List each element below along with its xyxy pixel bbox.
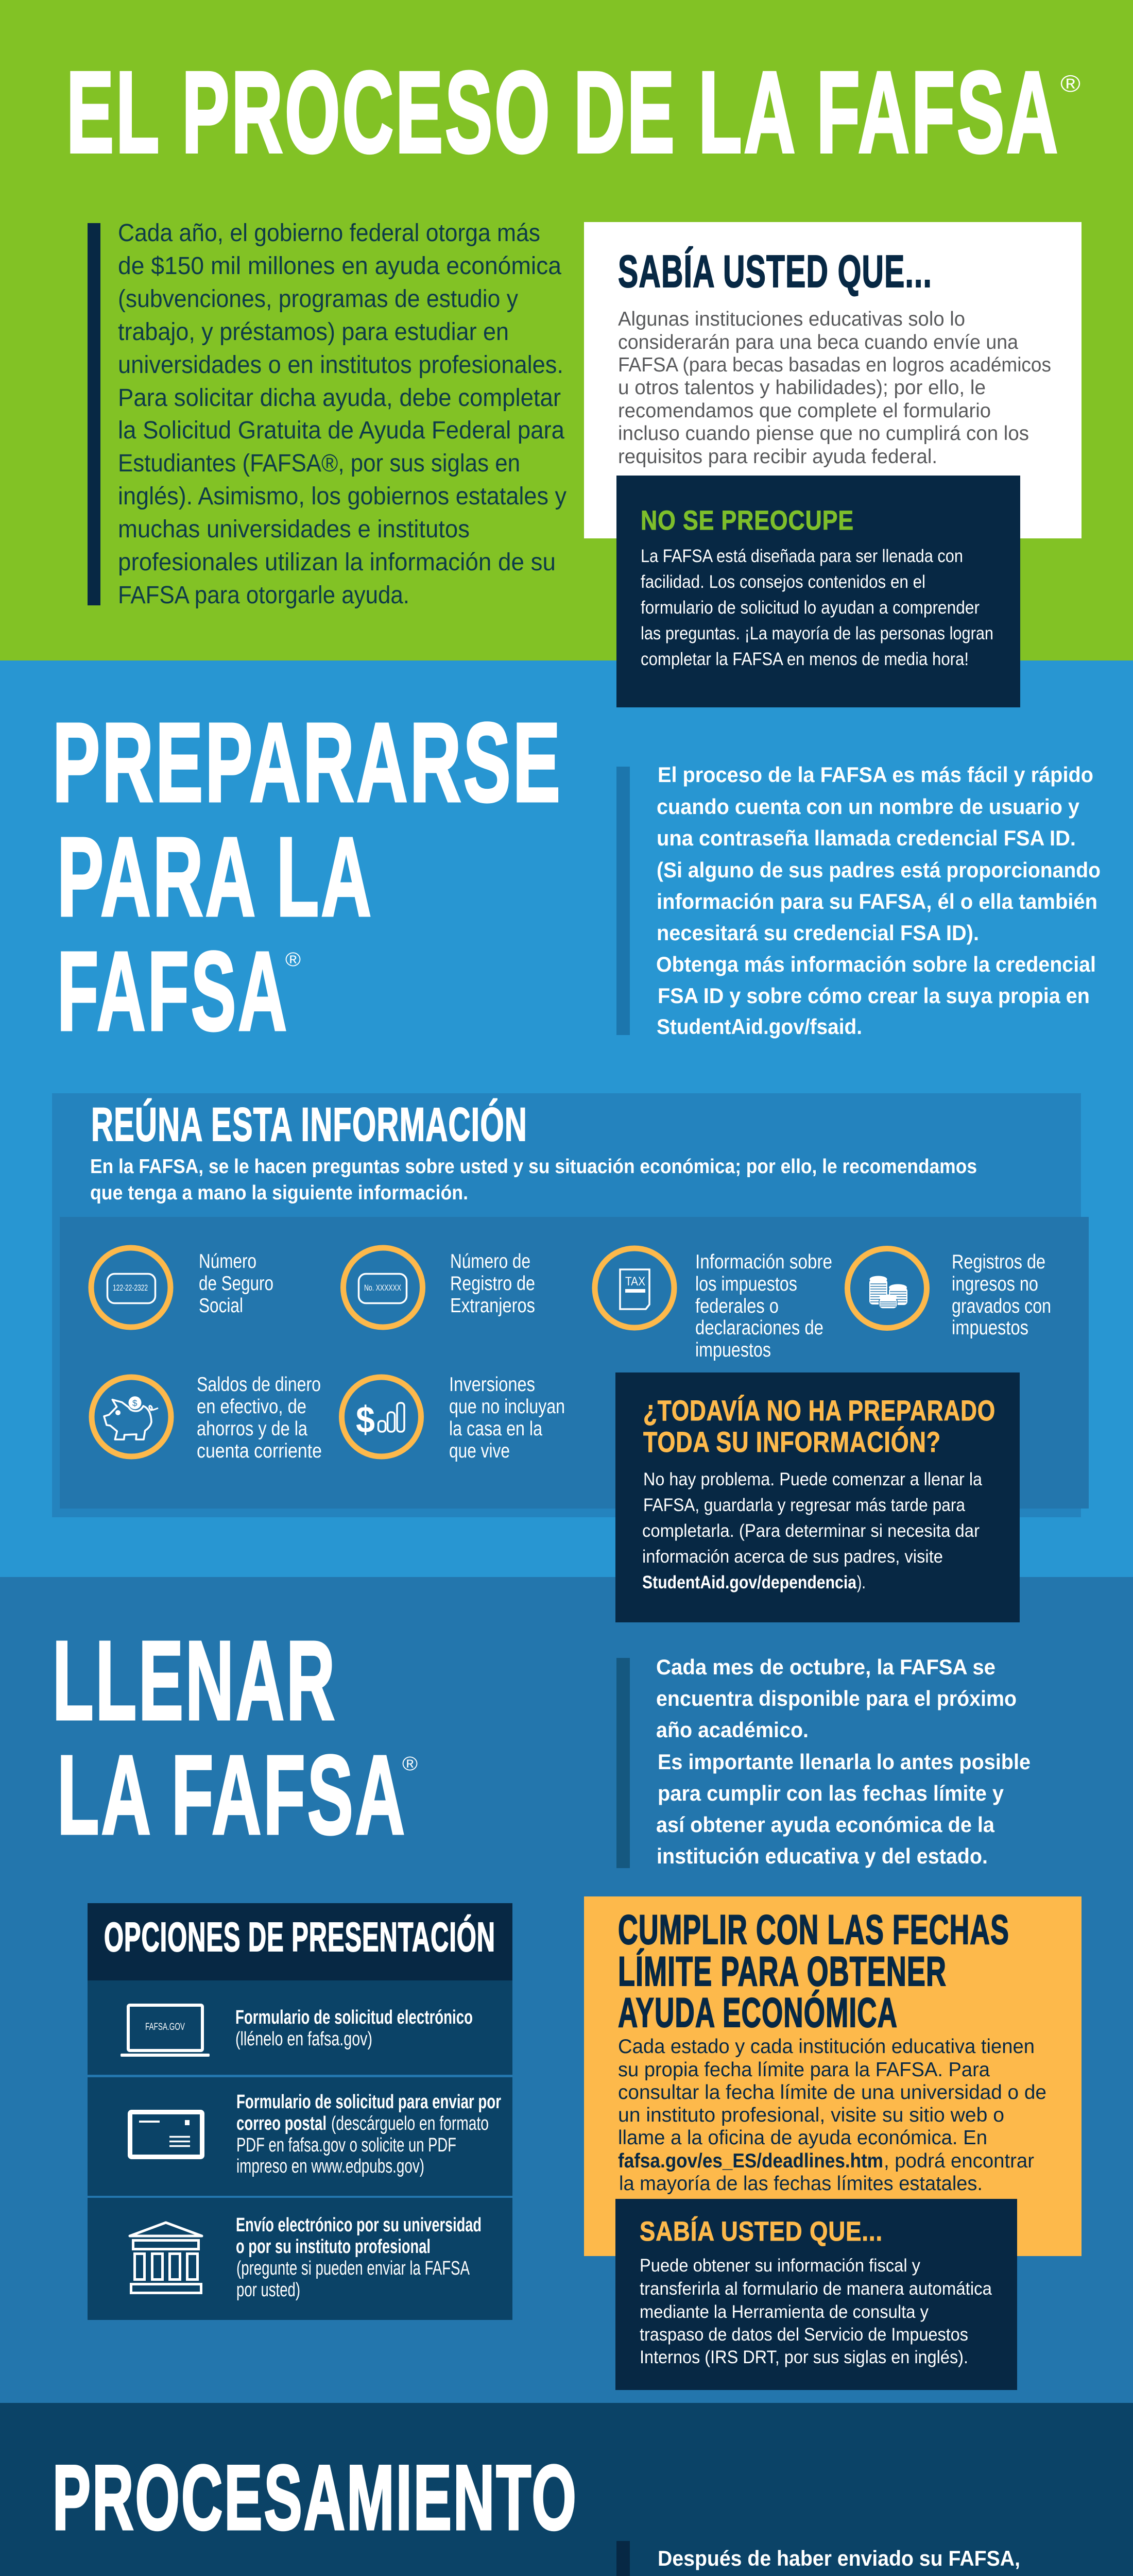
intro text block: universidades o en institutos profesionales. (118, 351, 563, 379)
text: sabía usted que body: FAFSA (para becas basadas en logros académicos (618, 354, 1051, 376)
heading: todavía no ha preparado (643, 1394, 995, 1458)
label: ingresos no gravados: impuestos (952, 1317, 1028, 1339)
text block: preparation intro: (Si alguno de sus padres está proporcionando (657, 858, 1101, 882)
label: ingresos no gravados: Registros de (952, 1251, 1045, 1273)
label: número de registro de extranjeros (450, 1250, 535, 1317)
section background: bright blue prepare (0, 660, 1133, 1577)
text: todavía body: No hay problema. Puede comenzar a llenar la (643, 1469, 982, 1489)
text: irs body: transferirla al formulario de manera automática (640, 2279, 992, 2299)
intro text block (88, 219, 566, 609)
text: reúna intro: En la FAFSA, se le hacen preguntas sobre usted y su situación económica; por ello, le recomendamos (90, 1156, 977, 1178)
label: impuestos federales: impuestos (695, 1339, 771, 1361)
title: ® (1060, 70, 1080, 97)
label: número de seguro social: Social (199, 1295, 243, 1317)
text: irs body: Puede obtener su información fiscal y (640, 2256, 920, 2276)
text: todavía body: ). (857, 1572, 866, 1592)
label: impuestos federales (695, 1251, 832, 1361)
icon: envelope (130, 2112, 202, 2157)
panel: reúna esta información (52, 1093, 1089, 1517)
icon: social security card (91, 1248, 170, 1327)
item: saldos de dinero (92, 1374, 322, 1462)
label: saldos de dinero (197, 1374, 322, 1462)
icon: piggy bank (92, 1377, 171, 1456)
label: impuestos federales: declaraciones de (695, 1317, 823, 1339)
icon: laptop: FAFSA.GOV (145, 2022, 185, 2032)
heading: reúna esta información: REÚNA ESTA INFORMACIÓN (91, 1098, 527, 1151)
text block: llenar intro (616, 1655, 1031, 1868)
label: inversiones: que no incluyan (449, 1396, 565, 1418)
panel: sabía usted que (irs) (615, 2199, 1017, 2390)
text: fechas límite body: Cada estado y cada institución educativa tienen (618, 2036, 1035, 2058)
text: correo postal: PDF en fafsa.gov o solicite un PDF (236, 2134, 456, 2156)
intro text block: inglés). Asimismo, los gobiernos estatales y (118, 483, 566, 510)
text: fechas límite body: , podrá encontrar (884, 2150, 1034, 2172)
text: sabía usted que body: considerarán para una beca cuando envíe una (618, 331, 1018, 353)
text block: preparation intro: una contraseña llamada credencial FSA ID. (657, 826, 1076, 850)
panel: cumplir con las fechas límite (584, 1896, 1082, 2256)
text: no se preocupe body: formulario de solicitud lo ayudan a comprender (641, 598, 980, 618)
text: fechas límite body: llame a la oficina de ayuda económica. En (618, 2127, 987, 2149)
heading: preparase para la fafsa (53, 700, 562, 1054)
text: correo postal: Formulario de solicitud para enviar por (236, 2091, 501, 2113)
heading: todavía no ha preparado: TODA SU INFORMACIÓN? (643, 1426, 941, 1458)
text: correo postal: (descárguelo en formato (331, 2113, 489, 2134)
text: fechas límite body: consultar la fecha límite de una universidad o de (618, 2081, 1046, 2104)
intro text block: (subvenciones, programas de estudio y (118, 285, 518, 313)
text: no se preocupe body: las preguntas. ¡La mayoría de las personas logran (641, 623, 993, 643)
text block: llenar intro: institución educativa y del estado. (657, 1844, 988, 1868)
text: no se preocupe body: La FAFSA está diseñada para ser llenada con (641, 546, 963, 566)
text block: preparation intro: El proceso de la FAFSA es más fácil y rápido (658, 762, 1093, 787)
text block: llenar intro: año académico. (656, 1718, 809, 1742)
panel: opciones de presentación (88, 1903, 512, 2320)
icon: dollar with bars (342, 1377, 421, 1456)
icon: social security card: 122-22-2322 (113, 1283, 148, 1293)
heading: sabía usted que (irs): SABÍA USTED QUE... (640, 2216, 883, 2247)
heading: todavía no ha preparado: ¿TODAVÍA NO HA PREPARADO (643, 1394, 995, 1427)
label: inversiones: que vive (449, 1440, 510, 1462)
heading: llenar la fafsa: LA FAFSA (57, 1733, 407, 1858)
icon: tax document (595, 1248, 674, 1328)
section background: dark blue processing (0, 2403, 1133, 2576)
text: fechas límite body: su propia fecha límite para la FAFSA. Para (618, 2059, 990, 2081)
heading: cumplir con las fechas límite: LÍMITE PARA OBTENER (618, 1948, 947, 1995)
panel: no se preocupe (616, 476, 1020, 707)
label: número de registro de extranjeros: Registro de (450, 1273, 535, 1295)
label: inversiones: la casa en la (449, 1418, 542, 1440)
text: sabía usted que body: Algunas instituciones educativas solo lo (618, 308, 965, 330)
text block: preparation intro: cuando cuenta con un nombre de usuario y (657, 794, 1080, 819)
text block: llenar intro: encuentra disponible para el próximo (656, 1686, 1017, 1710)
icon: institution building (130, 2223, 202, 2293)
header: opciones de presentación: OPCIONES DE PRESENTACIÓN (104, 1914, 495, 1960)
label: saldos de dinero: cuenta corriente (197, 1440, 322, 1462)
icon: dollar with bars: $ (356, 1399, 375, 1440)
text: reúna intro (90, 1156, 977, 1204)
text: envío electrónico: por usted) (236, 2279, 300, 2301)
heading: procesamiento de la fafsa (53, 2446, 578, 2576)
intro text block: muchas universidades e institutos (118, 516, 470, 543)
text: sabía usted que body: requisitos para recibir ayuda federal. (618, 446, 937, 468)
item: ingresos no gravados (848, 1249, 1051, 1339)
heading: no se preocupe: NO SE PREOCUPE (641, 505, 854, 536)
option: correo postal (88, 2077, 512, 2196)
intro text block: FAFSA para otorgarle ayuda. (118, 582, 409, 609)
icon: piggy bank: $ (132, 1398, 138, 1408)
item: inversiones (342, 1374, 565, 1462)
intro text block: Estudiantes (FAFSA®, por sus siglas en (118, 450, 520, 477)
intro text block: Cada año, el gobierno federal otorga más (118, 219, 540, 247)
label: número de seguro social: Número (199, 1250, 256, 1273)
label: ingresos no gravados (952, 1251, 1051, 1339)
heading: sabía usted que: SABÍA USTED QUE... (618, 246, 932, 297)
heading: cumplir con las fechas límite: AYUDA ECONÓMICA (618, 1989, 898, 2036)
heading: preparase para la fafsa: FAFSA (57, 929, 289, 1054)
text: no se preocupe body (641, 546, 993, 669)
text: formulario electrónico: Formulario de solicitud electrónico (235, 2007, 473, 2028)
intro text block: de $150 mil millones en ayuda económica (118, 252, 561, 280)
text: sabía usted que body: recomendamos que complete el formulario (618, 400, 991, 422)
label: inversiones (449, 1374, 565, 1462)
intro text block: trabajo, y préstamos) para estudiar en (118, 318, 509, 346)
icon: laptop (121, 2005, 210, 2057)
label: impuestos federales: federales o (695, 1295, 779, 1317)
heading: preparase para la fafsa: PARA LA (57, 815, 373, 940)
label: impuestos federales: los impuestos (695, 1273, 797, 1295)
text: fechas límite body (618, 2036, 1046, 2195)
option: envío electrónico (88, 2198, 512, 2320)
icon: tax document: TAX (625, 1275, 645, 1289)
text: reúna intro: que tenga a mano la siguiente información. (90, 1182, 468, 1204)
text: sabía usted que body (618, 308, 1051, 468)
panel: items list (60, 1217, 1089, 1509)
panel: sabía usted que (584, 222, 1082, 538)
label: saldos de dinero: Saldos de dinero (197, 1374, 321, 1396)
text: fechas límite body: un instituto profesional, visite su sitio web o (618, 2104, 1004, 2126)
label: ingresos no gravados: gravados con (952, 1295, 1051, 1317)
icon: coin stacks (848, 1249, 927, 1328)
text: sabía usted que body: incluso cuando piense que no cumplirá con los (618, 422, 1029, 445)
label: número de registro de extranjeros: Número de (450, 1250, 530, 1273)
text block: preparation intro: StudentAid.gov/fsaid. (657, 1014, 862, 1039)
section background: medium blue fill out (0, 1577, 1133, 2403)
text block: procesamiento intro (616, 2541, 1037, 2576)
heading: preparase para la fafsa: PREPARARSE (53, 700, 562, 825)
icon: alien registration card (343, 1248, 422, 1327)
heading: cumplir con las fechas límite (618, 1907, 1009, 2036)
intro text block: Para solicitar dicha ayuda, debe completar (118, 384, 561, 412)
text: todavía body (642, 1469, 982, 1592)
intro text block: profesionales utilizan la información de su (118, 549, 556, 576)
text: irs body (640, 2256, 992, 2367)
label: impuestos federales: Información sobre (695, 1251, 832, 1273)
intro text block: la Solicitud Gratuita de Ayuda Federal para (118, 417, 564, 444)
text: sabía usted que body: u otros talentos y habilidades); por ello, le (618, 377, 986, 399)
text: todavía body: FAFSA, guardarla y regresar más tarde para (643, 1495, 965, 1515)
text: envío electrónico: Envío electrónico por su universidad (236, 2214, 482, 2236)
heading: llenar la fafsa (53, 1618, 418, 1858)
text: todavía body: información acerca de sus padres, visite (642, 1547, 943, 1567)
heading: preparase para la fafsa: ® (285, 949, 301, 971)
icon: alien registration card: No. XXXXXX (364, 1283, 401, 1293)
text: todavía body: StudentAid.gov/dependencia (642, 1572, 856, 1592)
text: irs body: Internos (IRS DRT, por sus siglas en inglés). (640, 2347, 968, 2367)
text: no se preocupe body: facilidad. Los consejos contenidos en el (641, 572, 925, 592)
text: formulario electrónico: (llénelo en fafsa.gov) (235, 2028, 372, 2050)
text: envío electrónico: o por su instituto profesional (236, 2236, 431, 2258)
text block: llenar intro: Es importante llenarla lo antes posible (658, 1750, 1031, 1774)
heading: llenar la fafsa: ® (402, 1753, 418, 1775)
header: opciones de presentación (88, 1903, 512, 1980)
text: formulario electrónico (235, 2007, 473, 2050)
label: saldos de dinero: en efectivo, de (197, 1396, 306, 1418)
item: número de registro de extranjeros (343, 1248, 535, 1327)
text: todavía body: completarla. (Para determinar si necesita dar (642, 1521, 980, 1541)
item: impuestos federales (595, 1248, 832, 1361)
label: número de registro de extranjeros: Extranjeros (450, 1295, 535, 1317)
label: inversiones: Inversiones (449, 1374, 535, 1396)
text block: preparation intro (616, 762, 1101, 1039)
text: correo postal (236, 2091, 501, 2177)
label: número de seguro social (199, 1250, 273, 1317)
text block: preparation intro: FSA ID y sobre cómo crear la suya propia en (658, 984, 1090, 1008)
text: irs body: traspaso de datos del Servicio de Impuestos (640, 2325, 968, 2345)
text: irs body: mediante la Herramienta de consulta y (640, 2302, 929, 2322)
section background: green intro (0, 0, 1133, 660)
text block: preparation intro: necesitará su credencial FSA ID). (657, 921, 979, 945)
text: fechas límite body: la mayoría de las fechas límites estatales. (619, 2173, 983, 2195)
text block: procesamiento intro: Después de haber enviado su FAFSA, (658, 2546, 1020, 2570)
panel: todavía no ha preparado (615, 1372, 1020, 1622)
text: correo postal: impreso en www.edpubs.gov) (236, 2156, 424, 2177)
item: número de seguro social (91, 1248, 273, 1327)
text block: llenar intro: para cumplir con las fechas límite y (658, 1781, 1004, 1805)
heading: procesamiento de la fafsa: PROCESAMIENTO (53, 2446, 578, 2549)
label: saldos de dinero: ahorros y de la (197, 1418, 307, 1440)
text block: preparation intro: Obtenga más información sobre la credencial (656, 952, 1096, 976)
text: correo postal: correo postal (236, 2113, 327, 2134)
label: ingresos no gravados: ingresos no (952, 1273, 1038, 1295)
text block: preparation intro: información para su FAFSA, él o ella también (657, 889, 1097, 913)
text: envío electrónico: (pregunte si pueden enviar la FAFSA (236, 2258, 470, 2279)
option: formulario electrónico (88, 1980, 512, 2075)
heading: llenar la fafsa: LLENAR (53, 1618, 337, 1743)
text: fechas límite body: fafsa.gov/es_ES/deadlines.htm (618, 2150, 883, 2172)
text: no se preocupe body: completar la FAFSA en menos de media hora! (641, 649, 969, 669)
text block: llenar intro: Cada mes de octubre, la FAFSA se (656, 1655, 995, 1679)
label: número de seguro social: de Seguro (199, 1273, 273, 1295)
text: envío electrónico (236, 2214, 482, 2301)
text block: llenar intro: así obtener ayuda económica de la (656, 1812, 995, 1837)
